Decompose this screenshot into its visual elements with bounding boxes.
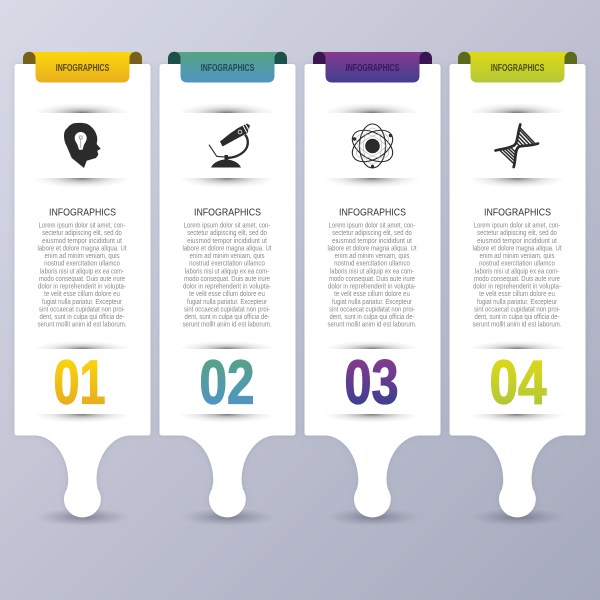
body text: te velit esse cillum dolore eu (44, 291, 120, 298)
shadows (33, 103, 131, 423)
body text: labore et dolore magna aliqua. Ut (182, 246, 272, 252)
body text: nostrud exercitation ullamco (334, 261, 410, 268)
panel: card 04 (450, 52, 586, 517)
body text: dolor in reprehenderit in volupta- (473, 284, 561, 291)
number 04: 04 (490, 348, 547, 418)
panel: card 03 (304, 52, 440, 517)
ribbon (30, 52, 135, 82)
card shape (450, 64, 586, 517)
body text: fugiat nulla pariatur. Excepteur (477, 299, 558, 306)
body text: te velit esse cillum dolore eu (334, 291, 410, 298)
body text: enim ad minim veniam, quis (44, 253, 120, 260)
card shape (304, 64, 440, 517)
body text: sint occaecat cupidatat non proi- (329, 306, 415, 313)
body text: nostrud exercitation ullamco (479, 261, 555, 268)
body text: labore et dolore magna aliqua. Ut (472, 246, 562, 252)
shadows (178, 103, 276, 423)
body text: nostrud exercitation ullamco (189, 261, 265, 268)
body text: fugiat nulla pariatur. Excepteur (42, 299, 123, 306)
body text: sectetur adipiscing elit, sed do (187, 230, 267, 237)
body text: modo consequat. Duis aute irure (329, 276, 415, 283)
ribbon label: INFOGRAPHICS (346, 63, 399, 74)
body text: Lorem ipsum dolor sit amet, con- (329, 223, 415, 230)
ribbon (320, 52, 425, 82)
body text: eiusmod tempor incididunt ut (187, 238, 267, 245)
body text: eiusmod tempor incididunt ut (42, 238, 122, 245)
ribbon tabs (313, 52, 432, 64)
body text (182, 223, 272, 329)
title: INFOGRAPHICS (49, 207, 116, 219)
body text: te velit esse cillum dolore eu (189, 291, 265, 298)
body text: dolor in reprehenderit in volupta- (183, 284, 271, 291)
title: INFOGRAPHICS (339, 207, 406, 219)
ribbon (175, 52, 280, 82)
body text: fugiat nulla pariatur. Excepteur (187, 299, 268, 306)
body text: sint occaecat cupidatat non proi- (184, 306, 270, 313)
body text: modo consequat. Duis aute irure (474, 276, 560, 283)
ribbon label: INFOGRAPHICS (491, 63, 544, 74)
icon: atom (347, 124, 398, 168)
body text: serunt mollit anim id est laborum. (182, 322, 272, 329)
body text: enim ad minim veniam, quis (190, 253, 265, 260)
body text: enim ad minim veniam, quis (480, 253, 555, 260)
ribbon tabs (23, 52, 142, 64)
body text (328, 223, 417, 329)
body text: serunt mollit anim id est laborum. (472, 322, 562, 329)
body text: fugiat nulla pariatur. Excepteur (332, 299, 413, 306)
panel: card 01 (14, 52, 150, 517)
number 01: 01 (54, 348, 106, 418)
title: INFOGRAPHICS (194, 207, 261, 219)
body text: serunt mollit anim id est laborum. (328, 322, 417, 329)
card shape (160, 64, 296, 517)
body text: labore et dolore magna aliqua. Ut (38, 246, 127, 252)
body text: dent, sunt in culpa qui officia de- (474, 314, 560, 321)
body text: enim ad minim veniam, quis (334, 253, 410, 260)
body text: nostrud exercitation ullamco (44, 261, 120, 268)
shadows (323, 103, 421, 423)
body text: modo consequat. Duis aute irure (184, 276, 270, 283)
body text: dent, sunt in culpa qui officia de- (40, 314, 124, 321)
body text: laboris nisi ut aliquip ex ea com- (330, 268, 414, 275)
body text: modo consequat. Duis aute irure (39, 276, 125, 283)
ribbon tabs (168, 52, 287, 64)
body text: Lorem ipsum dolor sit amet, con- (184, 223, 270, 230)
ribbon label: INFOGRAPHICS (56, 63, 109, 74)
body text: Lorem ipsum dolor sit amet, con- (39, 223, 125, 230)
panel: card 02 (160, 52, 296, 517)
shadows (468, 103, 566, 423)
ground shadows (36, 508, 565, 526)
body text: dent, sunt in culpa qui officia de- (184, 314, 270, 321)
body text (472, 223, 562, 329)
body text: dolor in reprehenderit in volupta- (38, 284, 126, 291)
ribbon tabs (458, 52, 577, 64)
number 02: 02 (200, 348, 254, 418)
body text: serunt mollit anim id est laborum. (38, 322, 127, 329)
body text: eiusmod tempor incididunt ut (477, 238, 557, 245)
icon: microscope (209, 124, 250, 168)
body text: sectetur adipiscing elit, sed do (477, 230, 557, 237)
body text: sint occaecat cupidatat non proi- (39, 306, 125, 313)
body text: laboris nisi ut aliquip ex ea com- (40, 268, 124, 275)
icon: DNA helix (496, 124, 538, 167)
ribbon (465, 52, 570, 82)
body text: sectetur adipiscing elit, sed do (332, 230, 412, 237)
body text: Lorem ipsum dolor sit amet, con- (474, 223, 560, 230)
title: INFOGRAPHICS (484, 207, 551, 219)
body text: dent, sunt in culpa qui officia de- (330, 314, 414, 321)
body text: eiusmod tempor incididunt ut (332, 238, 412, 245)
ribbon label: INFOGRAPHICS (201, 63, 254, 74)
number 03: 03 (344, 348, 398, 418)
body text: dolor in reprehenderit in volupta- (328, 284, 416, 291)
body text: laboris nisi ut aliquip ex ea com- (475, 268, 559, 275)
icon: head with light bulb (64, 123, 101, 168)
body text: te velit esse cillum dolore eu (479, 291, 555, 298)
body text (38, 223, 127, 329)
body text: sint occaecat cupidatat non proi- (474, 306, 560, 313)
body text: laboris nisi ut aliquip ex ea com- (185, 268, 269, 275)
body text: labore et dolore magna aliqua. Ut (328, 246, 417, 252)
body text: sectetur adipiscing elit, sed do (42, 230, 122, 237)
card shape (14, 64, 150, 517)
